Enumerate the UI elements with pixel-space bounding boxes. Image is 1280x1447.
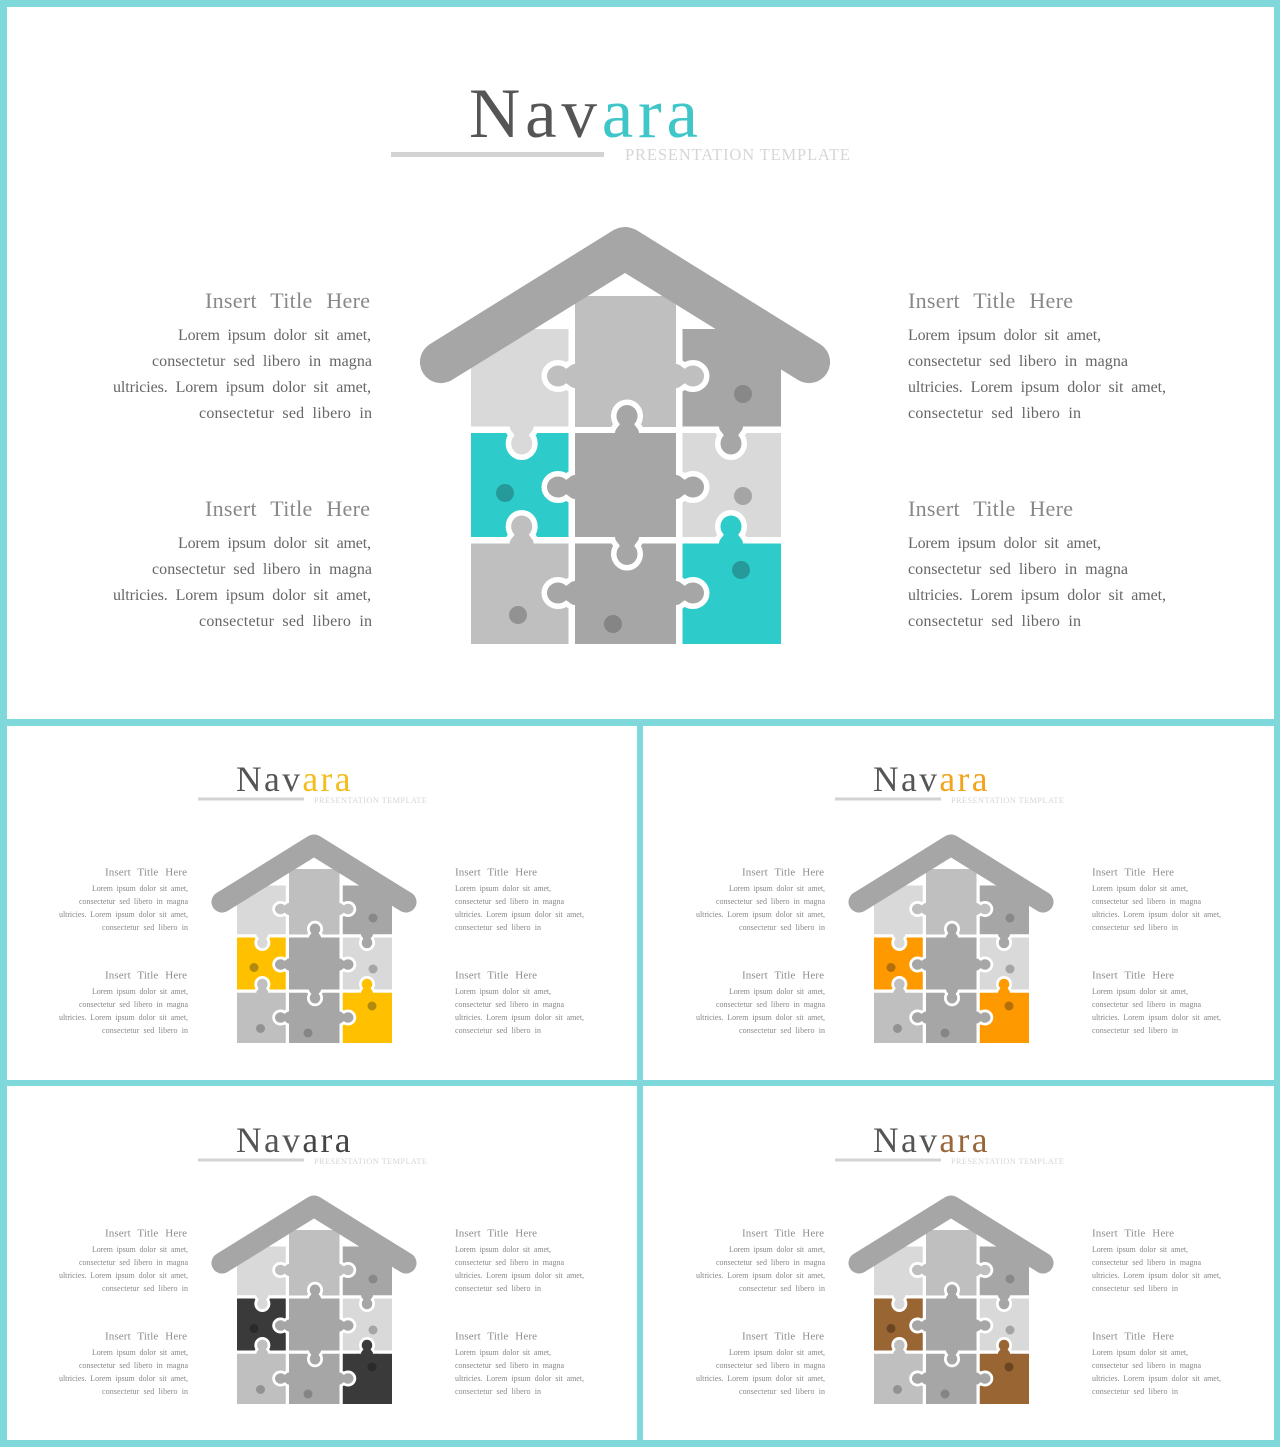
text block: upper left bbox=[113, 288, 372, 422]
text block: lower right: ultricies. Lorem ipsum dolor sit amet, bbox=[908, 587, 1166, 604]
text blocks: consectetur sed libero in magna bbox=[716, 1000, 825, 1009]
text blocks: consectetur sed libero in magna bbox=[79, 1000, 188, 1009]
text blocks: Lorem ipsum dolor sit amet, bbox=[729, 987, 825, 996]
text blocks: consectetur sed libero in bbox=[739, 923, 825, 932]
subtitle: PRESENTATION TEMPLATE bbox=[951, 1157, 1064, 1166]
text block: lower right: Insert Title Here bbox=[908, 496, 1073, 521]
text block: lower right: consectetur sed libero in magna bbox=[908, 561, 1128, 578]
text blocks: Insert Title Here bbox=[105, 1330, 187, 1342]
text block: upper left: ultricies. Lorem ipsum dolor sit amet, bbox=[113, 379, 371, 396]
text blocks: ultricies. Lorem ipsum dolor sit amet, bbox=[455, 1374, 584, 1383]
text blocks: Insert Title Here bbox=[1092, 1330, 1174, 1342]
text blocks: consectetur sed libero in magna bbox=[1092, 897, 1201, 906]
text blocks: consectetur sed libero in magna bbox=[79, 1258, 188, 1267]
text blocks: Insert Title Here bbox=[742, 1330, 824, 1342]
text blocks: ultricies. Lorem ipsum dolor sit amet, bbox=[1092, 910, 1221, 919]
text blocks: Lorem ipsum dolor sit amet, bbox=[455, 1245, 551, 1254]
text blocks: Insert Title Here bbox=[105, 970, 187, 982]
text blocks: consectetur sed libero in bbox=[455, 1387, 541, 1396]
text blocks bbox=[696, 866, 1221, 1035]
text blocks: Insert Title Here bbox=[105, 1228, 187, 1240]
title rule bbox=[835, 1158, 941, 1162]
text block: upper left: Lorem ipsum dolor sit amet, bbox=[178, 327, 371, 344]
text block: lower left: Insert Title Here bbox=[205, 496, 370, 521]
icon: puzzle house dark bbox=[211, 1196, 417, 1404]
text blocks: consectetur sed libero in bbox=[1092, 1284, 1178, 1293]
panel: main teal slide bbox=[7, 7, 1274, 719]
text blocks: ultricies. Lorem ipsum dolor sit amet, bbox=[455, 910, 584, 919]
text blocks: Insert Title Here bbox=[1092, 970, 1174, 982]
text blocks: consectetur sed libero in bbox=[739, 1284, 825, 1293]
panel: dark slide bbox=[7, 1086, 637, 1440]
text block: lower left: consectetur sed libero in magna bbox=[152, 561, 372, 578]
text blocks: consectetur sed libero in magna bbox=[79, 897, 188, 906]
text blocks: Lorem ipsum dolor sit amet, bbox=[92, 1348, 188, 1357]
text blocks: Insert Title Here bbox=[455, 1330, 537, 1342]
text blocks: Lorem ipsum dolor sit amet, bbox=[1092, 987, 1188, 996]
text blocks: consectetur sed libero in bbox=[1092, 1026, 1178, 1035]
text block: upper right: consectetur sed libero in magna bbox=[908, 353, 1128, 370]
text blocks: Lorem ipsum dolor sit amet, bbox=[92, 884, 188, 893]
roof bbox=[420, 227, 830, 383]
subtitle: PRESENTATION TEMPLATE bbox=[314, 1157, 427, 1166]
text blocks: ultricies. Lorem ipsum dolor sit amet, bbox=[696, 1013, 825, 1022]
text blocks: ultricies. Lorem ipsum dolor sit amet, bbox=[59, 1271, 188, 1280]
piece dots bbox=[496, 385, 752, 633]
text blocks: consectetur sed libero in bbox=[1092, 923, 1178, 932]
text blocks: ultricies. Lorem ipsum dolor sit amet, bbox=[696, 1374, 825, 1383]
text blocks: Insert Title Here bbox=[1092, 866, 1174, 878]
text blocks: consectetur sed libero in magna bbox=[455, 1000, 564, 1009]
text blocks: ultricies. Lorem ipsum dolor sit amet, bbox=[696, 910, 825, 919]
text block: upper left: consectetur sed libero in magna bbox=[152, 353, 372, 370]
text blocks: Lorem ipsum dolor sit amet, bbox=[729, 1245, 825, 1254]
text blocks: ultricies. Lorem ipsum dolor sit amet, bbox=[455, 1013, 584, 1022]
text blocks: Lorem ipsum dolor sit amet, bbox=[455, 987, 551, 996]
text blocks: consectetur sed libero in magna bbox=[455, 1361, 564, 1370]
text blocks: ultricies. Lorem ipsum dolor sit amet, bbox=[1092, 1374, 1221, 1383]
text block: upper right: Insert Title Here bbox=[908, 288, 1073, 313]
text blocks: consectetur sed libero in bbox=[455, 923, 541, 932]
text blocks bbox=[59, 866, 584, 1035]
text blocks: consectetur sed libero in bbox=[102, 1284, 188, 1293]
text blocks: consectetur sed libero in magna bbox=[716, 1258, 825, 1267]
icon: puzzle house orange bbox=[848, 834, 1054, 1043]
subtitle: PRESENTATION TEMPLATE bbox=[951, 796, 1064, 805]
text blocks: consectetur sed libero in bbox=[102, 1387, 188, 1396]
text blocks: Lorem ipsum dolor sit amet, bbox=[92, 987, 188, 996]
text blocks: ultricies. Lorem ipsum dolor sit amet, bbox=[1092, 1271, 1221, 1280]
text blocks: Insert Title Here bbox=[455, 970, 537, 982]
text blocks: Lorem ipsum dolor sit amet, bbox=[92, 1245, 188, 1254]
icon: puzzle house yellow bbox=[211, 834, 417, 1043]
text blocks: consectetur sed libero in bbox=[1092, 1387, 1178, 1396]
text blocks: ultricies. Lorem ipsum dolor sit amet, bbox=[696, 1271, 825, 1280]
text block: lower right: consectetur sed libero in bbox=[908, 613, 1081, 630]
text blocks: Lorem ipsum dolor sit amet, bbox=[455, 884, 551, 893]
title: Navara yellow: Navara bbox=[236, 759, 351, 799]
text block: upper right: Lorem ipsum dolor sit amet, bbox=[908, 327, 1101, 344]
icon: puzzle house brown bbox=[848, 1196, 1054, 1404]
puzzle pieces bbox=[471, 296, 781, 644]
text blocks: Lorem ipsum dolor sit amet, bbox=[1092, 1348, 1188, 1357]
text block: upper left: consectetur sed libero in bbox=[199, 405, 372, 422]
puzzle tabs bbox=[502, 356, 751, 613]
text blocks: consectetur sed libero in bbox=[102, 1026, 188, 1035]
panel: yellow slide bbox=[7, 726, 637, 1080]
text blocks: consectetur sed libero in magna bbox=[79, 1361, 188, 1370]
text blocks: consectetur sed libero in bbox=[455, 1284, 541, 1293]
text blocks: consectetur sed libero in bbox=[739, 1387, 825, 1396]
text block: lower right bbox=[908, 496, 1166, 630]
text blocks: consectetur sed libero in magna bbox=[455, 1258, 564, 1267]
title: Navara orange: Navara bbox=[873, 759, 988, 799]
text blocks: Insert Title Here bbox=[742, 866, 824, 878]
text blocks bbox=[696, 1228, 1221, 1396]
title rule bbox=[391, 152, 604, 157]
text blocks: consectetur sed libero in bbox=[102, 923, 188, 932]
text blocks: ultricies. Lorem ipsum dolor sit amet, bbox=[59, 1013, 188, 1022]
text blocks: Insert Title Here bbox=[105, 866, 187, 878]
panel: orange slide bbox=[643, 726, 1274, 1080]
text blocks: Insert Title Here bbox=[455, 866, 537, 878]
text blocks: Lorem ipsum dolor sit amet, bbox=[729, 1348, 825, 1357]
text blocks: consectetur sed libero in magna bbox=[455, 897, 564, 906]
title: Navara dark: Navara bbox=[236, 1120, 351, 1160]
text block: lower left: Lorem ipsum dolor sit amet, bbox=[178, 535, 371, 552]
text blocks: Lorem ipsum dolor sit amet, bbox=[729, 884, 825, 893]
title: Navara: Navara bbox=[469, 75, 698, 153]
panel: brown slide bbox=[643, 1086, 1274, 1440]
text blocks: ultricies. Lorem ipsum dolor sit amet, bbox=[59, 910, 188, 919]
text block: upper left: Insert Title Here bbox=[205, 288, 370, 313]
text blocks: ultricies. Lorem ipsum dolor sit amet, bbox=[455, 1271, 584, 1280]
title rule bbox=[198, 1158, 304, 1162]
text blocks: consectetur sed libero in bbox=[455, 1026, 541, 1035]
text block: lower left: consectetur sed libero in bbox=[199, 613, 372, 630]
subtitle: PRESENTATION TEMPLATE bbox=[314, 796, 427, 805]
text blocks: ultricies. Lorem ipsum dolor sit amet, bbox=[59, 1374, 188, 1383]
subtitle: PRESENTATION TEMPLATE bbox=[625, 145, 850, 164]
icon: puzzle house bbox=[420, 227, 830, 644]
text blocks: consectetur sed libero in magna bbox=[716, 1361, 825, 1370]
text block: lower right: Lorem ipsum dolor sit amet, bbox=[908, 535, 1101, 552]
text blocks bbox=[59, 1228, 584, 1396]
text blocks: Lorem ipsum dolor sit amet, bbox=[455, 1348, 551, 1357]
text blocks: ultricies. Lorem ipsum dolor sit amet, bbox=[1092, 1013, 1221, 1022]
text blocks: consectetur sed libero in magna bbox=[1092, 1361, 1201, 1370]
text blocks: consectetur sed libero in magna bbox=[1092, 1000, 1201, 1009]
text blocks: consectetur sed libero in magna bbox=[1092, 1258, 1201, 1267]
title rule bbox=[198, 798, 304, 800]
text block: lower left bbox=[113, 496, 372, 630]
title: Navara brown: Navara bbox=[873, 1120, 988, 1160]
text block: lower left: ultricies. Lorem ipsum dolor sit amet, bbox=[113, 587, 371, 604]
text blocks: consectetur sed libero in magna bbox=[716, 897, 825, 906]
text block: upper right: ultricies. Lorem ipsum dolor sit amet, bbox=[908, 379, 1166, 396]
text block: upper right bbox=[908, 288, 1166, 422]
text blocks: Insert Title Here bbox=[742, 970, 824, 982]
text block: upper right: consectetur sed libero in bbox=[908, 405, 1081, 422]
text blocks: Insert Title Here bbox=[455, 1228, 537, 1240]
title rule bbox=[835, 798, 941, 800]
text blocks: Insert Title Here bbox=[742, 1228, 824, 1240]
text blocks: Insert Title Here bbox=[1092, 1228, 1174, 1240]
text blocks: consectetur sed libero in bbox=[739, 1026, 825, 1035]
text blocks: Lorem ipsum dolor sit amet, bbox=[1092, 884, 1188, 893]
text blocks: Lorem ipsum dolor sit amet, bbox=[1092, 1245, 1188, 1254]
